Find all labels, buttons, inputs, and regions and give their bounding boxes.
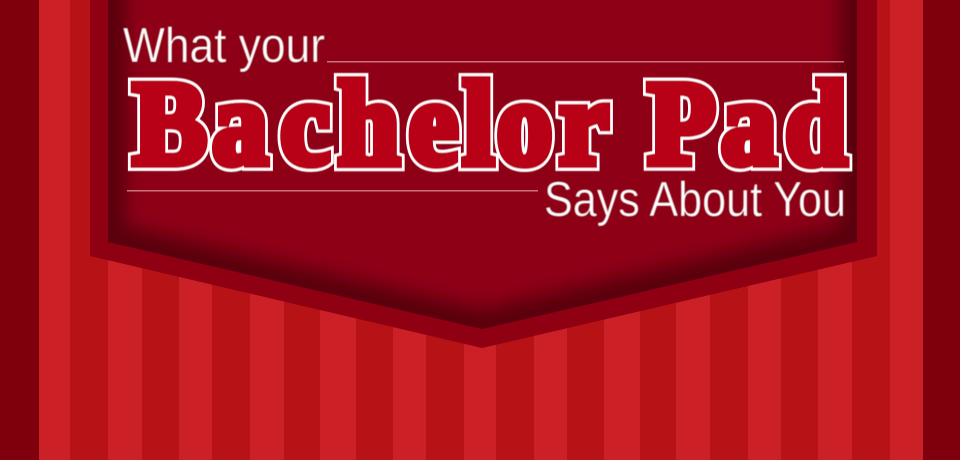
banner: inner panel with shadowed edge	[108, 0, 857, 330]
heading: Bachelor Pad: BachelorPad	[133, 56, 847, 190]
rule above title	[327, 61, 844, 62]
heading: Bachelor Pad: BachelorPad	[133, 56, 847, 190]
rule below title	[127, 190, 538, 192]
heading: Says About You: Says About You	[544, 173, 846, 227]
banner: outer pennant	[90, 0, 877, 348]
heading: What your: What your	[123, 19, 325, 73]
